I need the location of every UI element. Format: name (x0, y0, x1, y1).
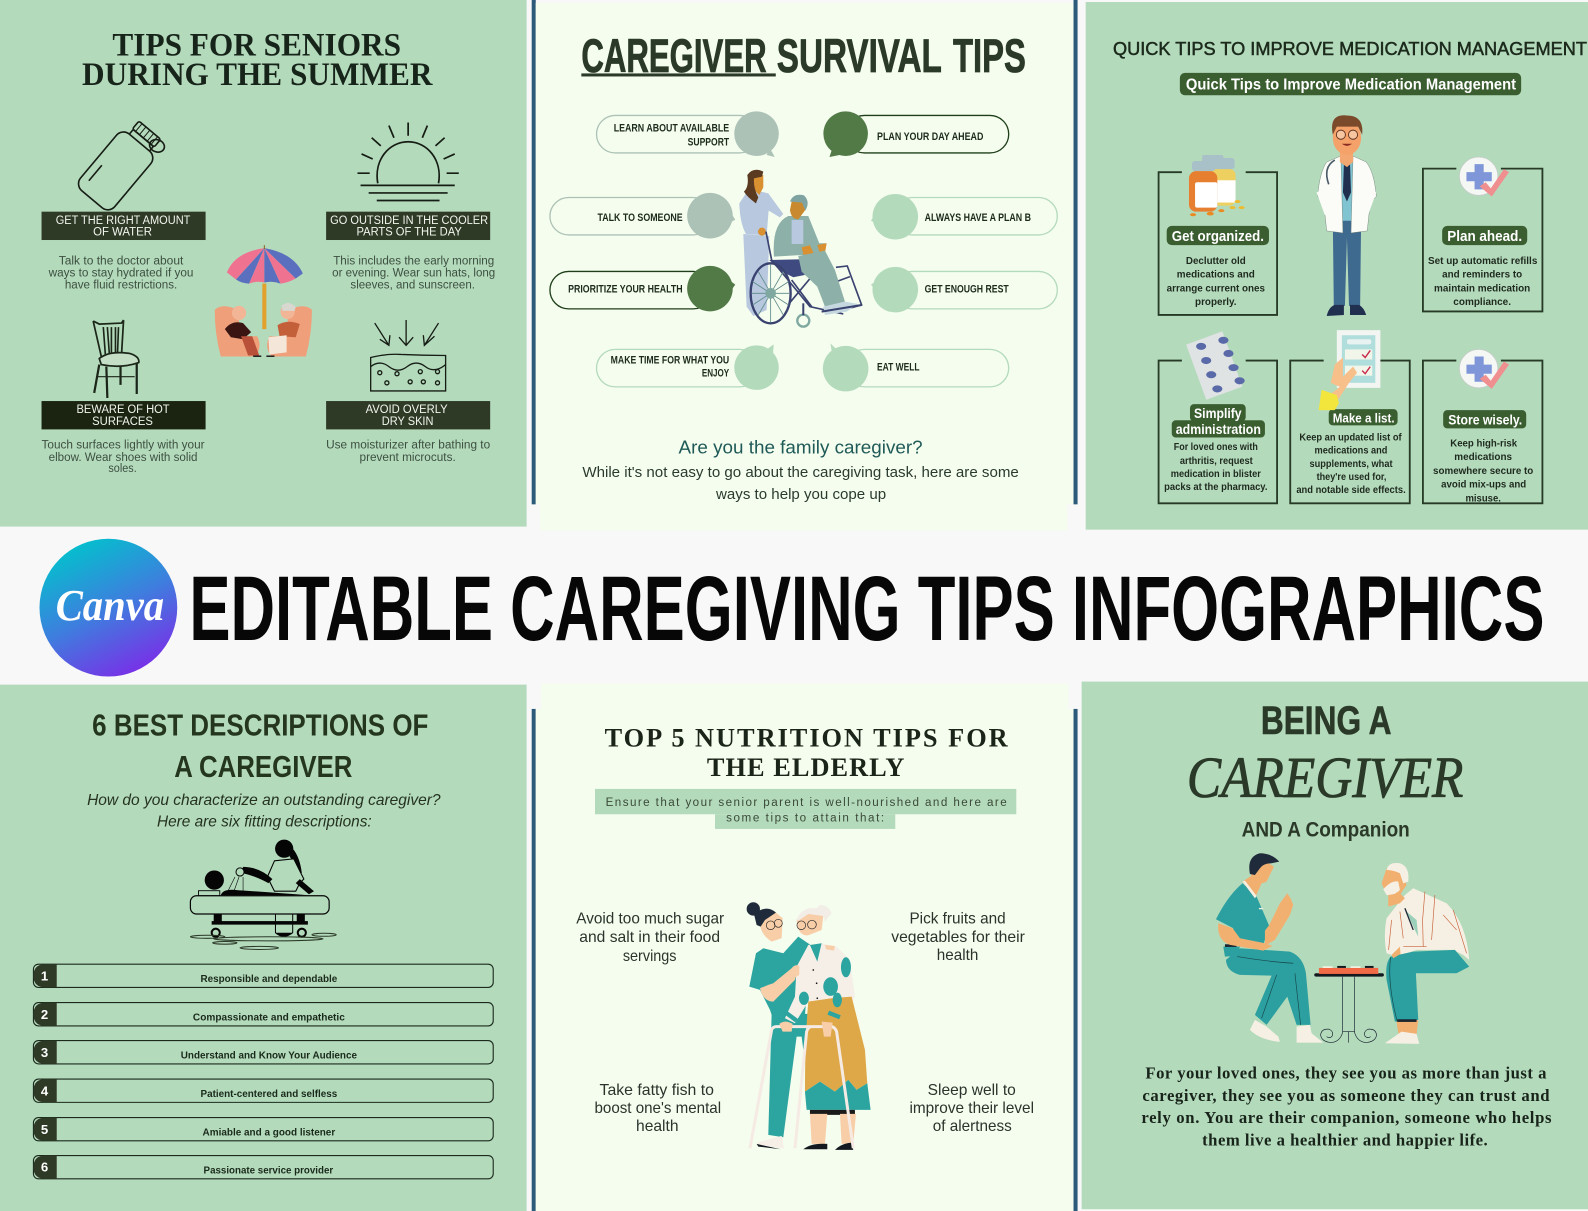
box: get organized (1159, 172, 1277, 315)
bar: beware of hot surfaces: SURFACES (92, 415, 153, 428)
tip: sleep well: of alertness (933, 1118, 1012, 1135)
text: caregiver intro: ways to help you cope up (715, 487, 886, 503)
text: caregiver intro (582, 465, 1019, 503)
tip: talk to someone (550, 193, 735, 239)
banner: editable caregiving tips infographics (0, 527, 1588, 684)
tip: fruits and vegetables: vegetables for their (891, 929, 1025, 946)
tip: fruits and vegetables (891, 911, 1025, 964)
box: plan ahead: Set up automatic refills (1428, 256, 1538, 267)
panel 5 title (605, 723, 1009, 782)
bar: avoid overly dry skin: DRY SKIN (382, 415, 433, 428)
icon: plus with check (store wisely) (1459, 349, 1509, 389)
box: simplify administration (1159, 361, 1277, 503)
intro strip: some tips to attain that: (726, 811, 884, 824)
logo: Canva circle: Canva (56, 580, 164, 630)
blue side bars: bottom middle panel (532, 709, 1078, 1211)
box: simplify administration: arthritis, request (1180, 456, 1253, 467)
text: water tip (48, 254, 193, 292)
panel 2 title: SURVIVAL (777, 30, 942, 83)
tip: learn about available support: SUPPORT (688, 136, 730, 148)
list item 1: 1 (41, 968, 48, 983)
panel 3 heading: QUICK TIPS TO IMPROVE MEDICATION MANAGEMENT (1113, 39, 1587, 59)
list item 4: Patient-centered and selfless (201, 1089, 338, 1100)
panel 4 title (92, 708, 428, 784)
panel 6 title: BEING A (1261, 699, 1392, 743)
box: simplify administration: administration (1176, 422, 1261, 437)
panel 4 subtitle: Here are six fitting descriptions: (157, 813, 372, 830)
text: companion paragraph (1141, 1064, 1552, 1149)
list item 3 (33, 1041, 493, 1064)
box: simplify administration: packs at the pharmacy. (1164, 482, 1268, 493)
panel 2 title: TIPS (953, 30, 1026, 83)
text: water tip: have fluid restrictions. (65, 279, 177, 292)
box: get organized: properly. (1195, 297, 1237, 308)
text: companion paragraph: them live a healthier and happier life. (1202, 1130, 1488, 1149)
text: dry skin tip: Use moisturizer after bathing to (326, 439, 491, 452)
panel 4 title: 6 BEST DESCRIPTIONS OF (92, 708, 428, 742)
box: get organized: arrange current ones (1167, 284, 1265, 295)
text: cooler parts tip (332, 254, 495, 292)
text: companion paragraph: rely on. You are their companion, someone who helps (1141, 1108, 1552, 1127)
list item 3: Understand and Know Your Audience (181, 1050, 357, 1061)
tip: always have a plan b (871, 194, 1057, 240)
icon: medicine bottles (1189, 155, 1245, 216)
text: dry skin tip (326, 439, 491, 464)
box: store wisely (1423, 361, 1542, 504)
text: caregiver intro: While it's not easy to go about the caregiving task, here are some (582, 465, 1019, 481)
panel 4 subtitle (87, 792, 441, 830)
box: plan ahead (1423, 169, 1542, 311)
bar: avoid overly dry skin (326, 401, 490, 429)
tip: get enough rest: GET ENOUGH REST (925, 284, 1009, 296)
panel: 6 best descriptions of a caregiver (0, 685, 527, 1211)
panel 1 title: TIPS FOR SENIORS (112, 28, 401, 64)
tip: sleep well: Sleep well to (928, 1082, 1016, 1099)
tip: sugar and salt: and salt in their food (579, 929, 720, 946)
icon: dry skin with arrows (371, 320, 446, 391)
panel 4 title: A CAREGIVER (174, 750, 352, 784)
illustration: doctor (1317, 115, 1376, 316)
list item 2: Compassionate and empathetic (193, 1012, 345, 1023)
tip: make time for what you enjoy: MAKE TIME FOR WHAT YOU (611, 355, 729, 367)
box: make a list: Keep an updated list of (1299, 433, 1402, 444)
text: companion paragraph: caregiver, they see you as someone they can trust and (1142, 1086, 1550, 1105)
panel 1 title (82, 28, 433, 93)
text: dry skin tip: prevent microcuts. (360, 451, 456, 464)
icon: water bottle (75, 116, 167, 214)
intro strip (595, 789, 1016, 829)
tip: sugar and salt: Avoid too much sugar (576, 911, 724, 928)
panel 4 subtitle: How do you characterize an outstanding caregiver? (87, 792, 441, 809)
tip: talk to someone: TALK TO SOMEONE (598, 212, 683, 224)
bar: beware of hot surfaces (42, 401, 206, 429)
text: cooler parts tip: sleeves, and sunscreen. (350, 279, 475, 292)
box: store wisely: somewhere secure to (1433, 466, 1533, 477)
bar: get the right amount of water: OF WATER (93, 225, 152, 238)
box: store wisely: avoid mix-ups and (1441, 480, 1526, 491)
box: make a list (1290, 361, 1410, 503)
icon: blister pack of pills (1186, 331, 1245, 400)
icon: sun on the horizon (358, 123, 459, 201)
tip: fatty fish: health (636, 1118, 679, 1135)
panel 6 title: AND A Companion (1242, 818, 1410, 842)
illustration: nurse pushing patient in wheelchair (739, 170, 862, 327)
blue side bars: top middle panel (532, 0, 1078, 504)
list item 6: 6 (41, 1160, 48, 1175)
tip: fruits and vegetables: Pick fruits and (909, 911, 1006, 928)
tip: get enough rest (871, 267, 1057, 312)
list item 1: Responsible and dependable (201, 974, 338, 985)
panel 1 title: DURING THE SUMMER (82, 57, 433, 93)
tip: eat well (823, 343, 1009, 391)
tip: always have a plan b: ALWAYS HAVE A PLAN B (925, 212, 1031, 224)
illustration: seniors under umbrella (215, 245, 312, 357)
tip: fatty fish: Take fatty fish to (600, 1082, 714, 1099)
illustration: bath bed with nurse (190, 840, 336, 949)
bar: go outside in the cooler parts of the day (326, 212, 490, 240)
box: make a list: Make a list. (1333, 410, 1395, 425)
text: are you the family caregiver: Are you the family caregiver? (679, 438, 923, 458)
box: get organized: Get organized. (1172, 229, 1264, 245)
panel 6 title (1187, 699, 1463, 842)
tip: make time for what you enjoy: ENJOY (702, 368, 729, 380)
text: hot surfaces tip (42, 439, 205, 475)
panel: being a caregiver and a companion (1082, 682, 1588, 1209)
box: store wisely: Keep high-risk (1450, 439, 1517, 450)
panel: top 5 nutrition tips (536, 684, 1074, 1211)
text: water tip: ways to stay hydrated if you (48, 266, 193, 279)
bar: get the right amount of water: GET THE RIGHT AMOUNT (56, 214, 190, 227)
box: make a list: medications and (1315, 446, 1388, 457)
list item 4 (33, 1079, 493, 1102)
list item 2 (33, 1003, 493, 1026)
text: hot surfaces tip: soles. (108, 462, 137, 475)
list item 2: 2 (41, 1007, 48, 1022)
bar: avoid overly dry skin: AVOID OVERLY (366, 403, 448, 416)
list item 6: Passionate service provider (204, 1165, 333, 1176)
tip: learn about available support: LEARN ABOUT AVAILABLE (614, 123, 729, 135)
tip: fatty fish: boost one's mental (594, 1100, 721, 1117)
tip: prioritize your health: PRIORITIZE YOUR HEALTH (568, 284, 683, 296)
icon: checklist in hand (1319, 330, 1380, 410)
tip: sleep well (909, 1082, 1034, 1135)
panel 6 title: CAREGIVER (1187, 745, 1463, 810)
tip: fatty fish (594, 1082, 721, 1135)
tip: eat well: EAT WELL (877, 362, 920, 374)
box: simplify administration: For loved ones with (1174, 442, 1258, 453)
box: plan ahead: Plan ahead. (1447, 229, 1522, 245)
illustration: caregiver and elder playing a board game (1216, 853, 1469, 1044)
text: hot surfaces tip: elbow. Wear shoes with solid (49, 451, 197, 464)
box: make a list: and notable side effects. (1296, 485, 1406, 496)
panel: caregiver survival tips (536, 3, 1074, 531)
tip: sugar and salt (576, 911, 724, 965)
text: companion paragraph: For your loved ones, they see you as more than just a (1145, 1064, 1547, 1083)
panel: quick tips to improve medication management (1086, 2, 1588, 530)
tip: make time for what you enjoy (597, 344, 779, 390)
list item 4: 4 (41, 1083, 49, 1098)
box: store wisely: Store wisely. (1448, 412, 1522, 427)
box: get organized: Declutter old (1186, 256, 1246, 267)
box: make a list: they're used for, (1317, 472, 1387, 483)
bar: get the right amount of water (42, 212, 206, 240)
list item 1 (33, 964, 493, 987)
panel 2 title: CAREGIVER (581, 30, 767, 83)
list item 6 (33, 1156, 493, 1179)
box: store wisely: misuse. (1465, 493, 1501, 504)
logo: Canva circle (40, 539, 177, 677)
icon: plus with check (1459, 157, 1509, 196)
box: plan ahead: and reminders to (1442, 269, 1522, 280)
text: water tip: Talk to the doctor about (59, 254, 184, 267)
text: hot surfaces tip: Touch surfaces lightly with your (42, 439, 205, 452)
list item 3: 3 (41, 1045, 48, 1060)
list item 5 (33, 1118, 493, 1141)
box: get organized: medications and (1177, 269, 1255, 280)
tip: sugar and salt: servings (623, 948, 677, 965)
illustration: nurse helping elderly woman with walker (747, 902, 871, 1150)
box: make a list: supplements, what (1309, 459, 1393, 470)
box: store wisely: medications (1454, 452, 1512, 463)
panel 2 title (581, 30, 1026, 83)
bar: go outside in the cooler parts of the day: GO OUTSIDE IN THE COOLER (330, 214, 488, 227)
tip: plan your day ahead: PLAN YOUR DAY AHEAD (877, 131, 984, 143)
box: simplify administration: Simplify (1194, 406, 1242, 421)
panel 5 title: TOP 5 NUTRITION TIPS FOR (605, 723, 1009, 752)
box: plan ahead: compliance. (1453, 297, 1511, 308)
list item 5: Amiable and a good listener (203, 1127, 335, 1138)
tip: fruits and vegetables: health (937, 947, 978, 964)
text: cooler parts tip: or evening. Wear sun hats, long (332, 266, 495, 279)
tip: prioritize your health (550, 266, 735, 311)
bar: beware of hot surfaces: BEWARE OF HOT (76, 403, 170, 416)
list item 5: 5 (41, 1122, 48, 1137)
bar: go outside in the cooler parts of the day: PARTS OF THE DAY (356, 225, 462, 238)
icon: chair (93, 320, 139, 398)
tip: plan your day ahead (823, 111, 1009, 157)
text: cooler parts tip: This includes the early morning (333, 254, 494, 267)
box: plan ahead: maintain medication (1434, 284, 1530, 295)
intro strip: Ensure that your senior parent is well-nourished and here are (606, 796, 1007, 809)
box: simplify administration: medication in blister (1171, 469, 1261, 480)
subtitle pill: Quick Tips to Improve Medication Management (1186, 77, 1517, 94)
panel 5 title: THE ELDERLY (707, 753, 904, 782)
panel: tips for seniors during the summer (0, 0, 527, 527)
tip: learn about available support (597, 111, 779, 157)
tip: sleep well: improve their level (909, 1100, 1034, 1117)
